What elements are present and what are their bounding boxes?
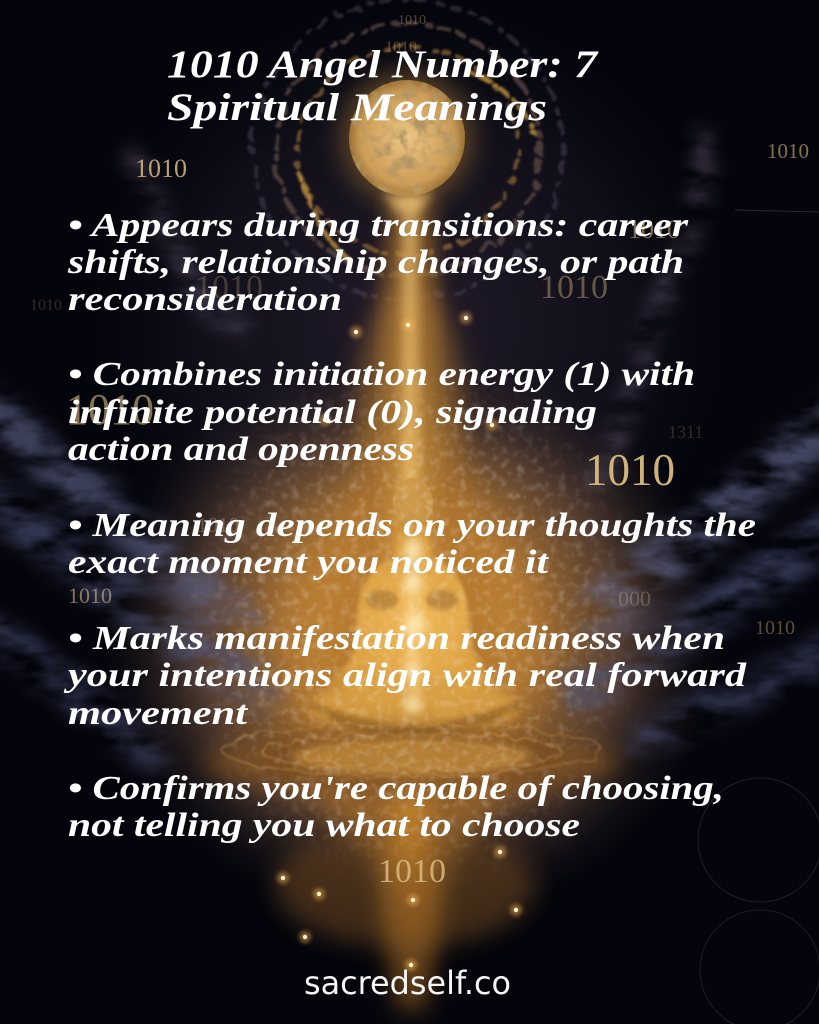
bullet: manifestation readiness: movement — [68, 695, 249, 732]
purple filaments — [130, 130, 704, 500]
bullet: initiation and potential — [68, 356, 695, 468]
floating 1010 numbers: 1010 — [767, 139, 809, 163]
bullet: thoughts in the moment — [68, 507, 756, 581]
floating 1010 numbers: 000 — [618, 586, 651, 611]
floating 1010 numbers: 1010 — [195, 269, 263, 306]
blue grey clouds left — [0, 410, 260, 750]
gold particle texture — [212, 390, 612, 850]
bullet: initiation and potential: • Combines initiation energy (1) with — [68, 356, 695, 393]
dark purple halo and golden nebula — [90, 0, 730, 947]
bullet: initiation and potential: action and openness — [68, 431, 414, 468]
blue grey clouds right — [580, 420, 819, 740]
title — [167, 43, 599, 129]
spiral rings around the moon — [253, 0, 563, 300]
floating 1010 numbers: 1311 — [668, 422, 703, 442]
floating 1010 numbers: 1010 — [68, 583, 112, 608]
floating 1010 numbers: 1010 — [585, 445, 675, 495]
floating 1010 numbers: 1010 — [30, 297, 62, 314]
bullet: transitions: • Appears during transitions: career — [68, 207, 689, 244]
bullet: thoughts in the moment: • Meaning depends on your thoughts the — [68, 507, 756, 544]
footer website: sacredself.co — [304, 964, 511, 1002]
faint sacred geometry circles — [698, 210, 819, 1024]
floating 1010 numbers: 1010 — [135, 154, 187, 183]
title: Spiritual Meanings — [167, 86, 547, 129]
bullet: manifestation readiness: • Marks manifestation readiness when — [68, 620, 725, 657]
floating 1010 numbers: 1010 — [197, 513, 239, 537]
bullet: transitions: reconsideration — [68, 281, 342, 318]
central light column — [300, 190, 520, 1010]
floating 1010 numbers: 1010 — [540, 269, 608, 306]
floating 1010 numbers: 1010 — [66, 385, 154, 434]
bullet: transitions: shifts, relationship changes, or path — [67, 244, 684, 281]
floating 1010 numbers: 1010 — [385, 39, 417, 56]
bullet: thoughts in the moment: exact moment you noticed it — [68, 544, 550, 581]
bullet: initiation and potential: infinite potential (0), signaling — [68, 394, 597, 431]
golden water ripples — [207, 724, 617, 796]
bullet: transitions — [67, 207, 689, 318]
bullet: manifestation readiness — [63, 620, 747, 732]
floating 1010 numbers: 1010 — [378, 853, 446, 890]
floating 1010 numbers: 1010 — [628, 215, 680, 244]
bullet: capable of choosing — [68, 770, 724, 844]
full moon — [339, 70, 475, 212]
bullet: capable of choosing: not telling you what to choose — [68, 807, 580, 844]
floating 1010 numbers: 1010 — [398, 13, 426, 28]
title: 1010 Angel Number: 7 — [167, 43, 599, 86]
meditating figure — [307, 478, 523, 742]
floating 1010 numbers: 1010 — [755, 617, 795, 639]
bullet: manifestation readiness: your intentions align with real forward — [63, 657, 747, 694]
glowing sparkles — [277, 312, 522, 971]
bullet: capable of choosing: • Confirms you're capable of choosing, — [68, 770, 724, 807]
